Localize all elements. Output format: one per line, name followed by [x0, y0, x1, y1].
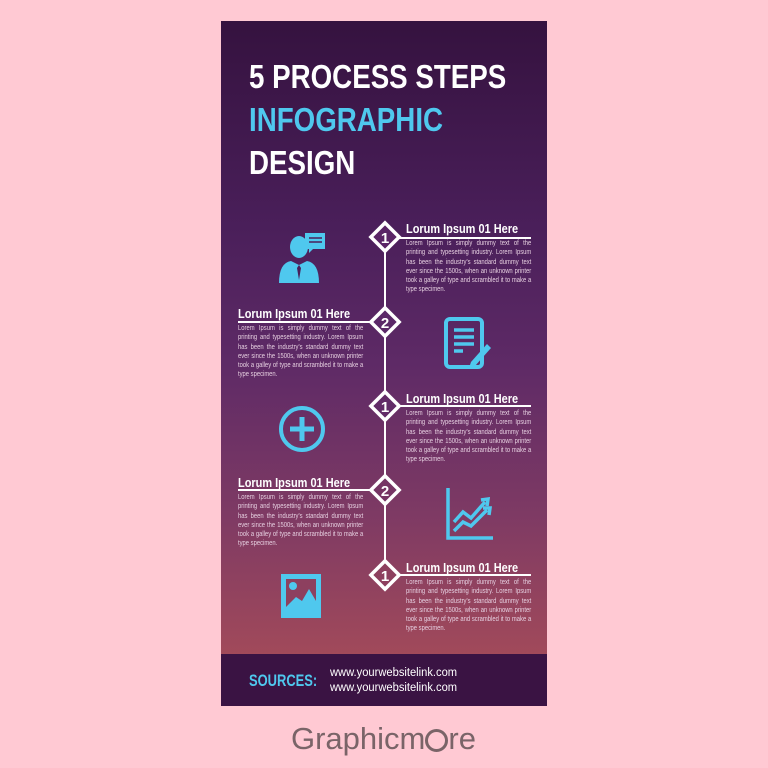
- title line 1: 5 PROCESS STEPS: [249, 58, 506, 95]
- step 2 text: Lorum Ipsum 01 Here: [238, 307, 350, 321]
- timeline: 1: [381, 230, 389, 247]
- links: [330, 667, 457, 694]
- footer: sources: [221, 654, 547, 706]
- logo: Graphicmore: Graphicm re: [291, 721, 476, 756]
- step 1 text: Lorum Ipsum 01 Here: [406, 222, 518, 236]
- timeline: 2: [381, 483, 389, 500]
- links: www.yourwebsitelink.com: [330, 667, 457, 679]
- icon: picture: [281, 574, 321, 618]
- title line 2: INFOGRAPHIC: [249, 101, 443, 138]
- timeline: 2: [381, 315, 389, 332]
- icon: chart: [446, 488, 493, 540]
- timeline: 1: [381, 568, 389, 585]
- step 4 text: Lorum Ipsum 01 Here: [238, 476, 350, 490]
- icon: person with speech bubble: [279, 233, 325, 283]
- step 2 text: Lorem Ipsum is simply dummy text of the printing and typesetting industry. Lorem Ipsum has been the industry's standard dummy text ever since the 1500s, when an unknown printer took a galley of type and scrambled it to make a type specimen.: [238, 325, 363, 378]
- title line 3: DESIGN: [249, 144, 355, 181]
- icon: plus circle: [279, 406, 325, 452]
- step 3 text: Lorem Ipsum is simply dummy text of the printing and typesetting industry. Lorem Ipsum has been the industry's standard dummy text ever since the 1500s, when an unknown printer took a galley of type and scrambled it to make a type specimen.: [406, 410, 531, 463]
- timeline: [238, 220, 531, 592]
- step 1 text: Lorem Ipsum is simply dummy text of the printing and typesetting industry. Lorem Ipsum has been the industry's standard dummy text ever since the 1500s, when an unknown printer took a galley of type and scrambled it to make a type specimen.: [406, 240, 531, 293]
- step 5 text: Lorum Ipsum 01 Here: [406, 561, 518, 575]
- sources label: SOURCES:: [249, 671, 317, 690]
- links: www.yourwebsitelink.com: [330, 682, 457, 694]
- step 5 text: Lorem Ipsum is simply dummy text of the printing and typesetting industry. Lorem Ipsum has been the industry's standard dummy text ever since the 1500s, when an unknown printer took a galley of type and scrambled it to make a type specimen.: [406, 579, 531, 632]
- panel: infographic: [221, 21, 547, 706]
- timeline: 1: [381, 399, 389, 416]
- step 3 text: Lorum Ipsum 01 Here: [406, 392, 518, 406]
- icon: document with pencil: [444, 317, 491, 369]
- step 4 text: Lorem Ipsum is simply dummy text of the printing and typesetting industry. Lorem Ipsum has been the industry's standard dummy text ever since the 1500s, when an unknown printer took a galley of type and scrambled it to make a type specimen.: [238, 494, 363, 547]
